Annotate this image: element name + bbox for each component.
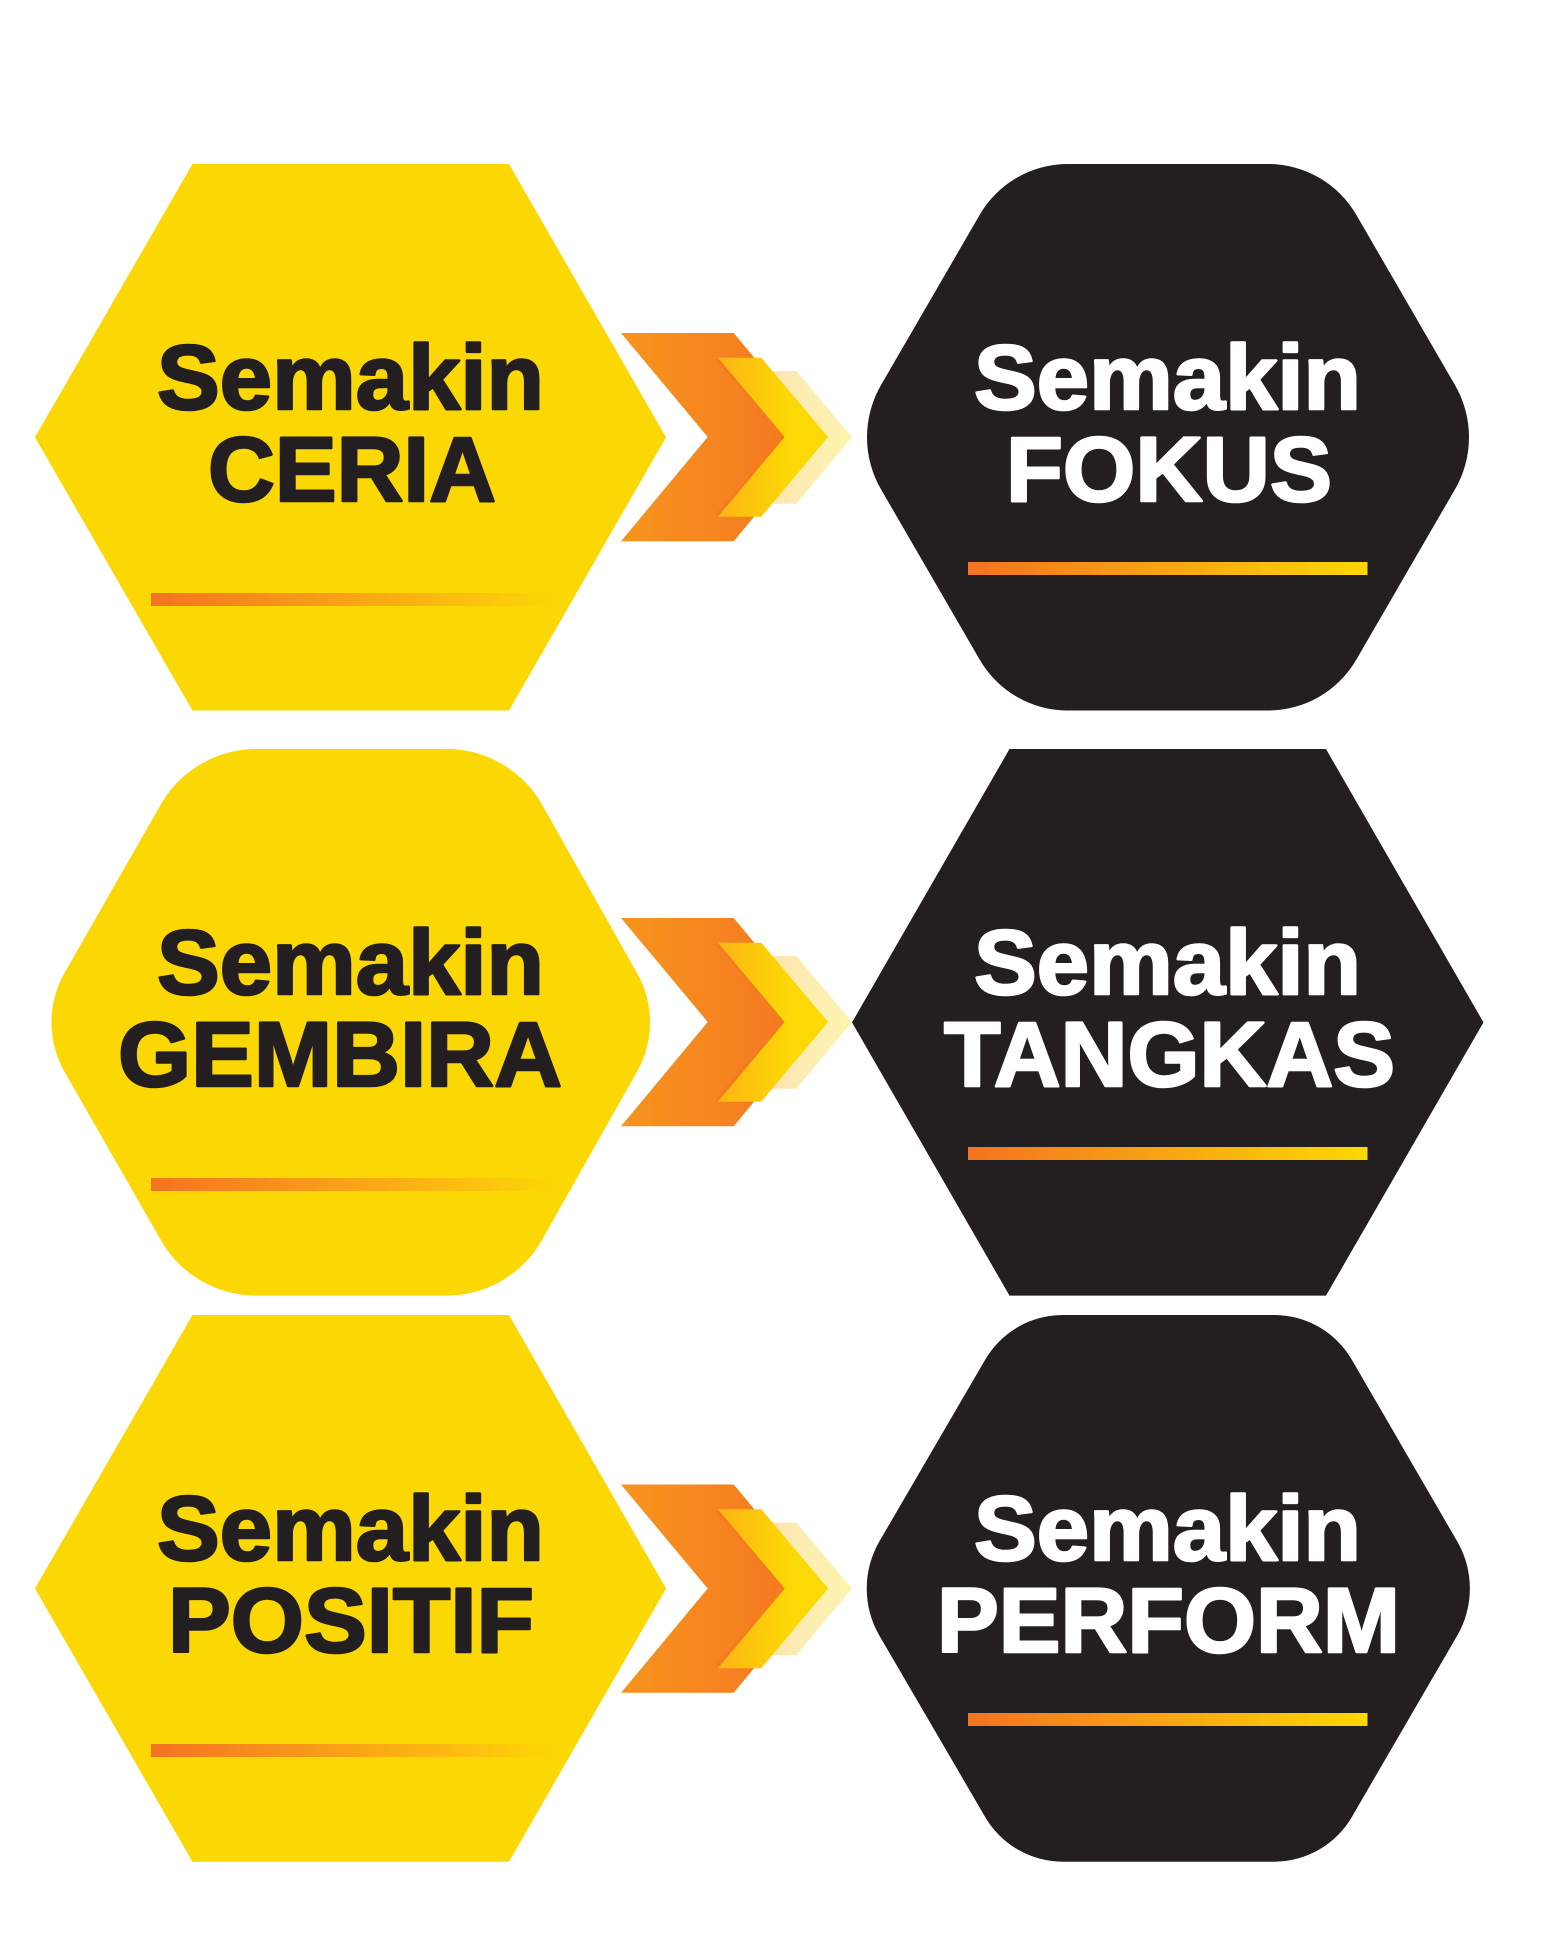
- heading: Semakin Ceria: Semakin: [157, 327, 544, 429]
- heading: Semakin Positif: Semakin: [157, 1478, 544, 1580]
- arrow: chevrons row 2: [621, 918, 852, 1126]
- panel: Semakin Perform: [867, 1315, 1470, 1862]
- heading: Semakin Perform: PERFORM: [937, 1570, 1400, 1672]
- heading: Semakin Fokus: FOKUS: [1006, 419, 1332, 521]
- heading: Semakin Ceria: [157, 327, 544, 521]
- panel: Semakin Positif: [35, 1315, 666, 1862]
- dark rounded hexagon: [867, 164, 1469, 710]
- panel: Semakin Tangkas: [852, 749, 1484, 1296]
- heading: Semakin Tangkas: [944, 912, 1395, 1106]
- gradient underline: [151, 1744, 551, 1757]
- gradient underline: [968, 1147, 1368, 1160]
- yellow sharp hexagon: [35, 164, 666, 710]
- heading: Semakin Fokus: Semakin: [974, 327, 1361, 429]
- panel: Semakin Ceria: [35, 164, 666, 710]
- arrow: chevrons row 3: [621, 1484, 852, 1693]
- heading: Semakin Ceria: CERIA: [208, 419, 496, 521]
- gradient underline: [151, 1178, 551, 1191]
- dark sharp hexagon: [852, 749, 1484, 1296]
- heading: Semakin Fokus: [974, 327, 1361, 521]
- heading: Semakin Perform: Semakin: [974, 1478, 1361, 1580]
- heading: Semakin Tangkas: Semakin: [974, 912, 1361, 1014]
- heading: Semakin Gembira: [118, 912, 562, 1106]
- dark rounded hexagon: [867, 1315, 1470, 1862]
- yellow rounded hexagon: [51, 749, 650, 1296]
- panel: Semakin Fokus: [867, 164, 1469, 710]
- gradient underline: [968, 562, 1368, 575]
- arrow: chevrons row 1: [621, 333, 852, 541]
- heading: Semakin Positif: [157, 1478, 544, 1672]
- heading: Semakin Gembira: GEMBIRA: [118, 1004, 562, 1106]
- gradient underline: [151, 593, 551, 606]
- gradient underline: [968, 1713, 1368, 1726]
- heading: Semakin Perform: [937, 1478, 1400, 1672]
- panel: Semakin Gembira: [51, 749, 650, 1296]
- heading: Semakin Positif: POSITIF: [168, 1570, 534, 1672]
- yellow sharp hexagon: [35, 1315, 666, 1862]
- heading: Semakin Tangkas: TANGKAS: [944, 1004, 1395, 1106]
- heading: Semakin Gembira: Semakin: [157, 912, 544, 1014]
